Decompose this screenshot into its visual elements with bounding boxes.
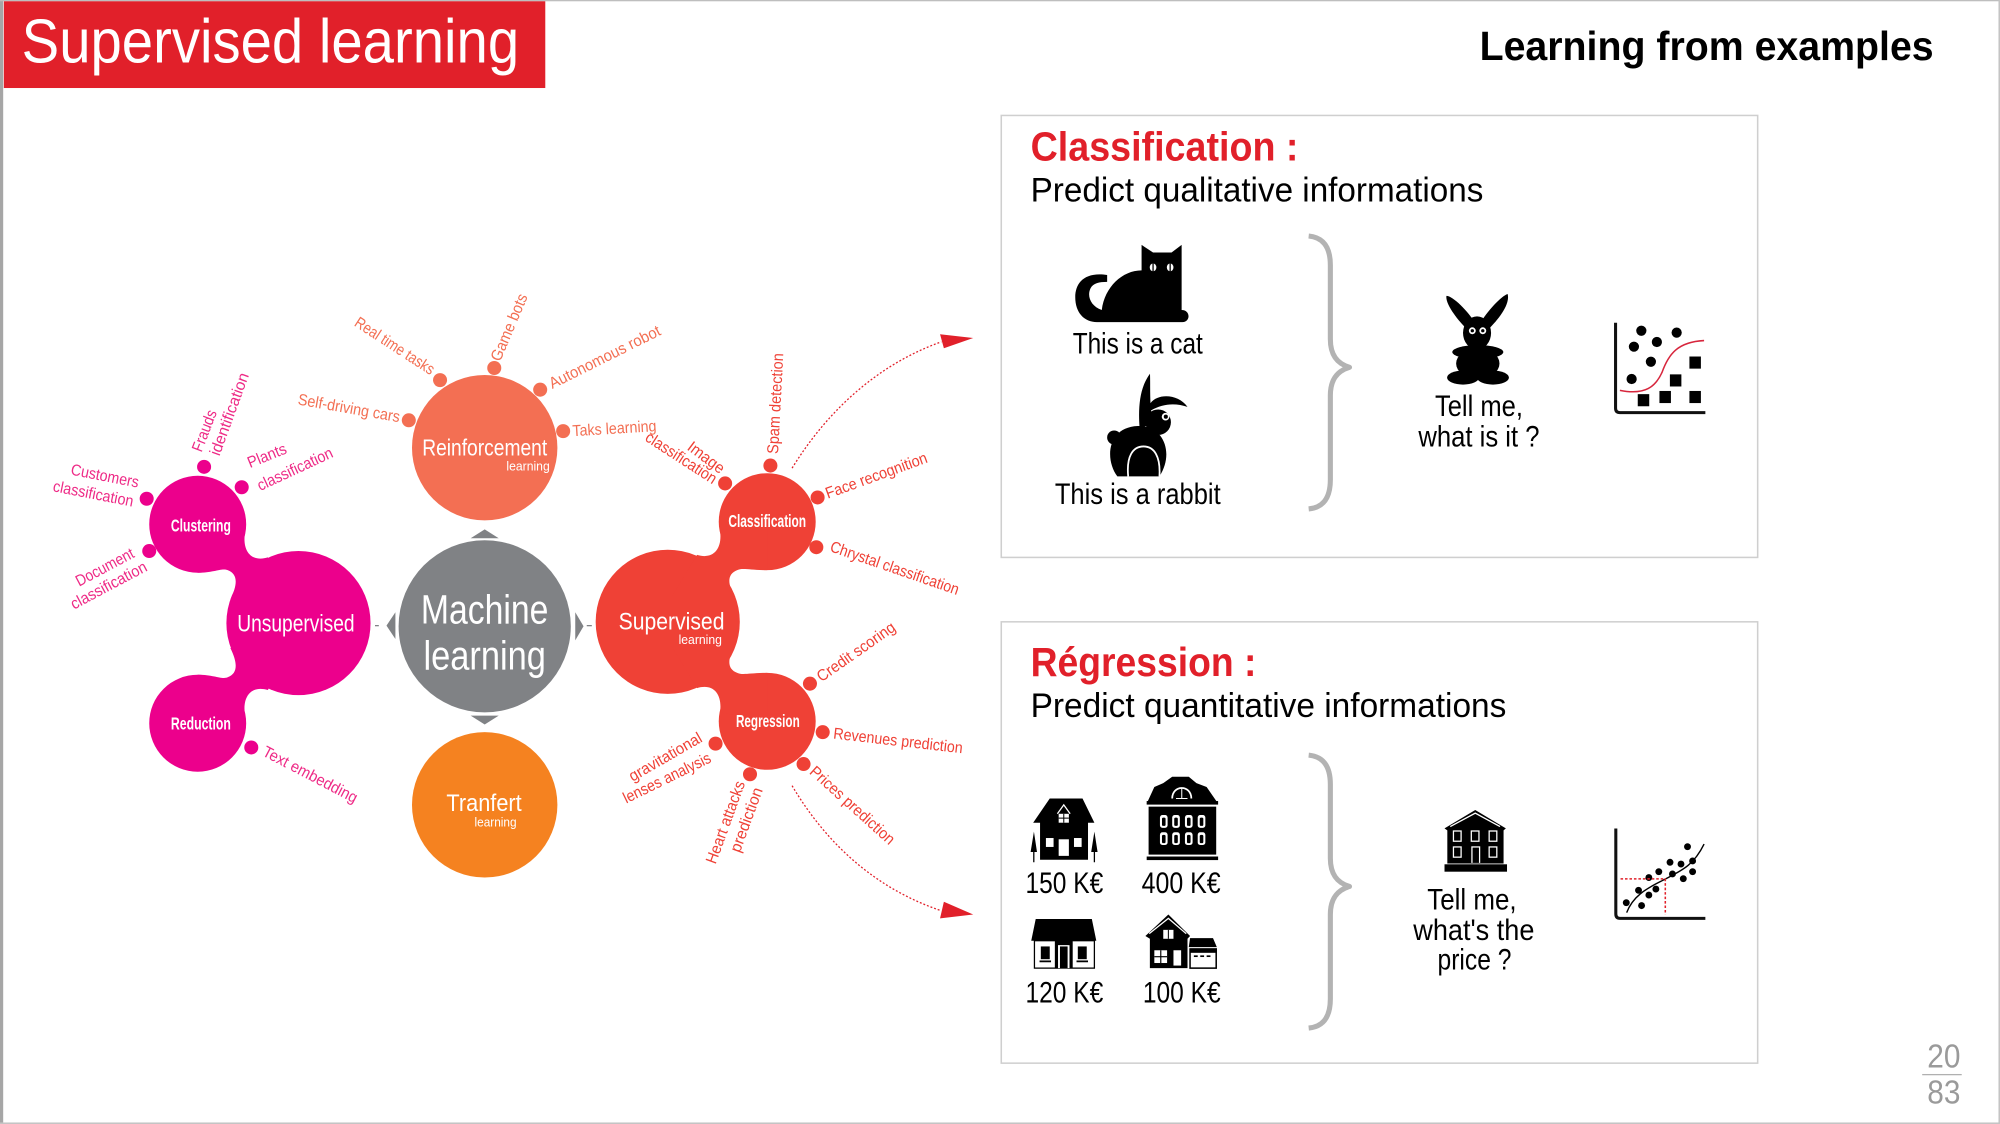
unsupervised leaf dots — [140, 460, 258, 754]
page number: 20 — [1927, 1039, 1960, 1076]
circle: transfer learning — [412, 732, 557, 878]
supervised labels: gravitational — [626, 730, 705, 785]
supervised labels: lenses analysis — [621, 750, 714, 807]
circle: transfer learning: Tranfert — [446, 790, 522, 817]
supervised labels: classification — [642, 429, 720, 488]
icon: house to price — [1445, 810, 1507, 872]
panel: classification — [1001, 115, 1758, 557]
price labels — [1026, 867, 1221, 1010]
supervised labels: Heart attacks — [703, 779, 749, 866]
price labels: 120 K€ — [1026, 977, 1103, 1010]
panel: regression — [1001, 622, 1758, 1063]
label: this is a rabbit: This is a rabbit — [1055, 478, 1221, 511]
chart: regression line — [1616, 828, 1705, 918]
circle: machine learning: learning — [423, 633, 546, 679]
question: tell me what's the price — [1412, 883, 1534, 976]
reinforcement labels: Taks learning — [572, 418, 657, 440]
reinforcement labels: Self-driving cars — [296, 392, 401, 426]
unsupervised labels: Plants — [245, 441, 289, 472]
icon: rabbit front view — [1446, 294, 1509, 385]
supervised labels: Spam detection — [765, 353, 787, 454]
icon: rabbit side view — [1107, 374, 1188, 476]
icon: house 120k — [1031, 919, 1096, 968]
reinforcement leaf dots — [402, 361, 570, 438]
price labels: 100 K€ — [1143, 977, 1221, 1010]
price labels: 150 K€ — [1026, 867, 1103, 900]
heading: regression: Régression : — [1031, 639, 1256, 685]
arrow: to classification — [792, 334, 973, 468]
supervised labels: prediction — [728, 785, 767, 855]
question: tell me what's the price: Tell me, — [1427, 883, 1517, 916]
blob: supervised — [596, 473, 816, 770]
title banner: Supervised learning — [22, 7, 519, 77]
unsupervised labels: Customers — [69, 462, 140, 492]
icon: mansion 400k — [1147, 777, 1218, 860]
brace — [1309, 236, 1349, 509]
direction triangles — [375, 529, 592, 724]
unsupervised labels: Frauds — [189, 408, 221, 454]
supervised labels: Chrystal classification — [828, 539, 961, 599]
unsupervised labels: Text embedding — [260, 744, 360, 807]
page number — [1922, 1039, 1962, 1111]
unsupervised labels: classification — [68, 559, 150, 613]
question: tell me what's the price: price ? — [1438, 943, 1511, 976]
chart: classification boundary — [1616, 323, 1705, 413]
unsupervised labels: classification — [52, 478, 135, 511]
price labels: 400 K€ — [1142, 867, 1221, 900]
blob: unsupervised: Clustering — [171, 515, 231, 535]
icon: cat — [1075, 245, 1189, 322]
blob: unsupervised — [149, 476, 371, 772]
text: predict quantitative: Predict quantitative informations — [1031, 687, 1506, 725]
question: tell me what's the price: what's the — [1412, 914, 1534, 947]
supervised labels: Revenues prediction — [832, 726, 964, 757]
circle: machine learning: Machine — [421, 587, 548, 633]
supervised labels: Face recognition — [823, 450, 930, 502]
question: tell me what is it: what is it ? — [1417, 420, 1540, 453]
supervised labels: Credit scoring — [814, 619, 899, 686]
circle: transfer learning: learning — [474, 815, 517, 830]
unsupervised labels: classification — [255, 445, 336, 495]
circle: machine learning — [399, 540, 571, 712]
blob: supervised: learning — [679, 632, 722, 647]
brace — [1309, 755, 1349, 1028]
supervised labels: Image — [684, 439, 728, 478]
circle: reinforcement learning: Reinforcement — [422, 434, 548, 460]
icon: house 150k — [1031, 798, 1098, 862]
blob: supervised: Supervised — [619, 608, 724, 635]
question: tell me what is it: Tell me, — [1435, 390, 1523, 423]
reinforcement labels: Real time tasks — [351, 314, 437, 379]
unsupervised labels: identification — [207, 371, 253, 458]
reinforcement labels: Autonomous robot — [546, 323, 664, 393]
circle: reinforcement learning: learning — [506, 459, 550, 474]
supervised labels: Prices prediction — [806, 763, 898, 848]
arrow: to regression — [792, 786, 973, 918]
icon: house 100k — [1145, 915, 1217, 968]
circle: reinforcement learning — [412, 375, 557, 520]
blob: unsupervised: Unsupervised — [237, 610, 355, 637]
supervised labels — [621, 353, 964, 866]
page number: 83 — [1927, 1074, 1960, 1111]
unsupervised labels — [52, 371, 360, 807]
blob: supervised: Regression — [736, 711, 800, 731]
reinforcement labels — [296, 291, 664, 440]
blob: supervised: Classification — [728, 511, 806, 531]
unsupervised labels: Document — [73, 545, 138, 590]
heading: classification: Classification : — [1031, 124, 1298, 170]
supervised leaf dots — [709, 459, 830, 781]
reinforcement labels: Game bots — [488, 291, 532, 364]
blob: unsupervised: Reduction — [171, 714, 231, 734]
subtitle: learning from examples: Learning from examples — [1480, 23, 1934, 69]
text: predict qualitative: Predict qualitative informations — [1031, 172, 1483, 210]
question: tell me what is it — [1417, 390, 1540, 453]
label: this is a cat: This is a cat — [1073, 327, 1203, 360]
machine learning diagram — [52, 291, 964, 878]
